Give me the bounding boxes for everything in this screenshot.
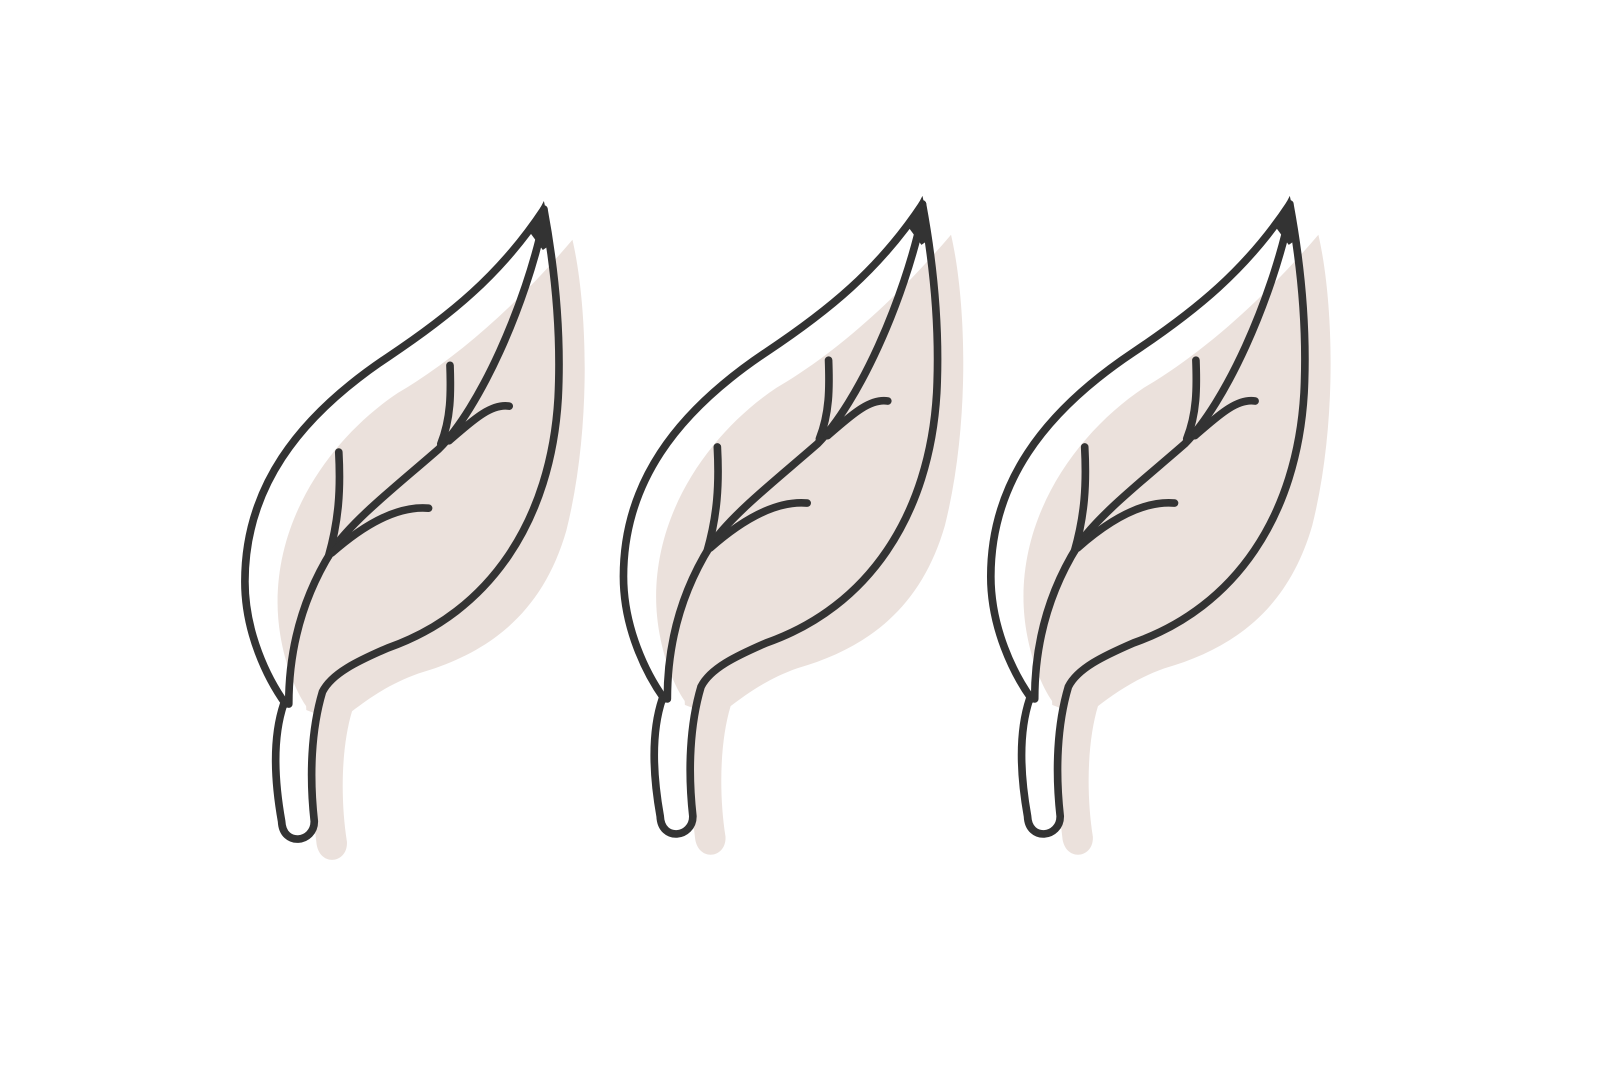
icon: right leaf — [991, 196, 1331, 855]
icon: left leaf — [245, 201, 585, 860]
icon: middle leaf — [623, 196, 963, 855]
